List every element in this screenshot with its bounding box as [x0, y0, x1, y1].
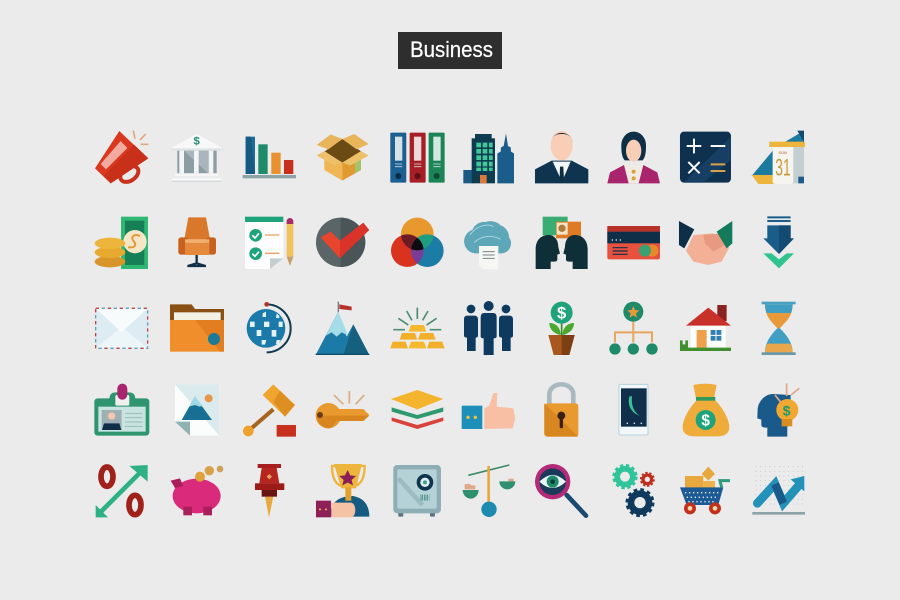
icon: hierarchy chart: [609, 302, 658, 355]
icon: money bag: [683, 384, 729, 436]
icon: percent growth arrow: [96, 465, 148, 517]
icon: key: [316, 391, 369, 428]
icon: businesswoman: [607, 132, 660, 183]
icon: office chair: [178, 217, 216, 266]
icon: balance scale: [463, 465, 515, 517]
title: Business: [410, 37, 493, 62]
icon: safe: [393, 465, 441, 517]
icon: gavel: [243, 384, 296, 437]
icon: push pin: [255, 464, 284, 517]
icon: gold bars: [390, 308, 445, 348]
icon: head with idea bulb: [757, 383, 799, 437]
icon: two heads talking: [536, 217, 588, 269]
icon: money bag: $: [701, 413, 710, 430]
icon: credit card: [607, 226, 660, 259]
icon: mountain with flag: [316, 302, 369, 355]
icon: money plant: [548, 302, 575, 355]
icon: bank: $: [193, 136, 200, 148]
icon: gears: [614, 465, 654, 516]
icon: piggy bank: [171, 466, 223, 515]
icon: hourglass: [762, 302, 796, 355]
icon: house: [680, 305, 731, 351]
icon: cloud document: [464, 221, 511, 269]
icon: calendar with sails: 31: [775, 154, 791, 181]
icon: calculator: [680, 132, 731, 183]
icon: padlock: [544, 384, 578, 437]
icon: coins and banknote: [95, 217, 148, 269]
icon: businessman: [535, 131, 588, 183]
icon: folder: [170, 304, 224, 352]
icon: binders: [390, 133, 445, 183]
icon: trophy in hand: [316, 464, 369, 517]
icon: desk globe: [247, 302, 291, 352]
icon: thumbs up: [462, 393, 515, 429]
icon: calendar with sails: [752, 131, 805, 184]
icon: head with idea bulb: $: [783, 402, 791, 418]
icon: money plant: $: [557, 304, 567, 323]
icon: people group: [464, 301, 513, 355]
icon: megaphone: [95, 131, 148, 185]
icon: bank: [171, 134, 223, 182]
icon: download arrow: [763, 217, 794, 268]
icon: open box: [317, 134, 369, 181]
icon: checklist and pencil: [245, 217, 293, 269]
icon: color venn circles: [391, 218, 444, 267]
icon: layers: [391, 390, 443, 429]
icon: id badge: [94, 384, 149, 436]
icon: business tower: [463, 133, 514, 183]
icon: calendar with sails: SUN: [778, 150, 787, 155]
icon: shopping cart: [680, 467, 730, 514]
title: [398, 32, 502, 69]
icon: image paper: [175, 384, 219, 436]
icon: bar chart: [243, 137, 296, 178]
icon: growth trend arrow: [752, 467, 805, 515]
icon: check mark badge: [316, 218, 369, 267]
icon: smartphone: [619, 384, 648, 435]
icon: handshake: [679, 221, 732, 265]
icon: airmail envelope: [96, 308, 148, 348]
icon: magnifier with eye: [535, 464, 586, 516]
